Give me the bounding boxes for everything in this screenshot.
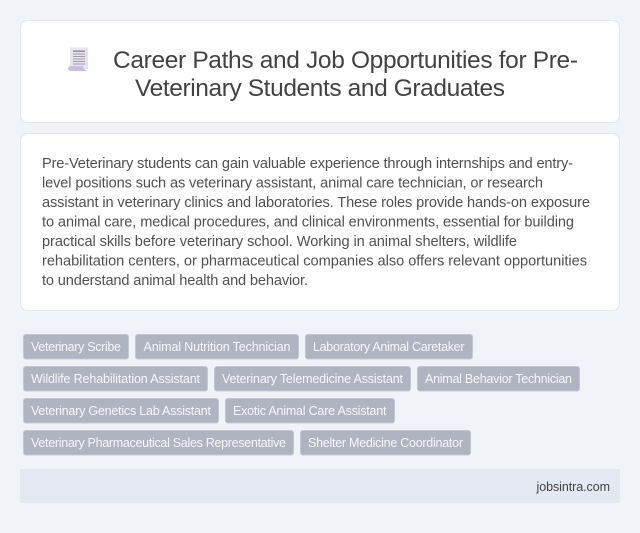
text block: description: to understand animal health and behavior. <box>42 273 308 289</box>
panel: header <box>20 20 620 122</box>
tag: Veterinary Scribe: Veterinary Scribe <box>31 340 121 354</box>
text block: description: level positions such as veterinary assistant, animal care technician, or research <box>42 176 543 192</box>
tag: Laboratory Animal Caretaker: Laboratory Animal Caretaker <box>313 340 464 354</box>
text block: description <box>42 156 590 289</box>
tag: Veterinary Pharmaceutical Sales Representative <box>24 430 294 455</box>
panel: description <box>20 134 620 310</box>
tag: Exotic Animal Care Assistant: Exotic Animal Care Assistant <box>233 404 387 418</box>
tag: Animal Behavior Technician: Animal Behavior Technician <box>425 372 572 386</box>
tag: Exotic Animal Care Assistant <box>226 398 394 423</box>
tag: Veterinary Telemedicine Assistant: Veterinary Telemedicine Assistant <box>222 372 404 386</box>
tag: Shelter Medicine Coordinator: Shelter Medicine Coordinator <box>308 436 463 450</box>
tag: Veterinary Telemedicine Assistant <box>214 366 410 391</box>
tag list <box>24 334 580 455</box>
title <box>113 47 578 102</box>
tag: Wildlife Rehabilitation Assistant <box>24 366 208 391</box>
tag: Animal Behavior Technician <box>418 366 580 391</box>
icon: document scroll <box>68 48 88 71</box>
text block: description: practical skills before veterinary school. Working in animal shelters, wildlife <box>42 234 517 250</box>
tag: Shelter Medicine Coordinator <box>300 430 470 455</box>
tag: Animal Nutrition Technician <box>136 334 298 359</box>
text block: description: Pre-Veterinary students can gain valuable experience through internships and entry- <box>42 156 573 172</box>
tag: Animal Nutrition Technician: Animal Nutrition Technician <box>144 340 291 354</box>
title: Career Paths and Job Opportunities for Pre- <box>113 47 578 74</box>
tag: Veterinary Genetics Lab Assistant <box>24 398 218 423</box>
text block: description: assistant in veterinary clinics and laboratories. These roles provide hands-on exposure <box>42 195 590 211</box>
footer <box>20 469 620 503</box>
tag: Wildlife Rehabilitation Assistant: Wildlife Rehabilitation Assistant <box>31 372 201 386</box>
tag: Veterinary Pharmaceutical Sales Representative: Veterinary Pharmaceutical Sales Representative <box>31 436 286 450</box>
title: Veterinary Students and Graduates <box>135 75 505 102</box>
tag: Laboratory Animal Caretaker <box>306 334 472 359</box>
tag: Veterinary Genetics Lab Assistant: Veterinary Genetics Lab Assistant <box>31 404 212 418</box>
footer: jobsintra.com <box>536 480 610 494</box>
text block: description: to animal care, medical procedures, and clinical environments, essential for building <box>42 214 574 230</box>
text block: description: rehabilitation centers, or pharmaceutical companies also offers relevant opportunities <box>42 254 587 270</box>
tag: Veterinary Scribe <box>24 334 128 359</box>
